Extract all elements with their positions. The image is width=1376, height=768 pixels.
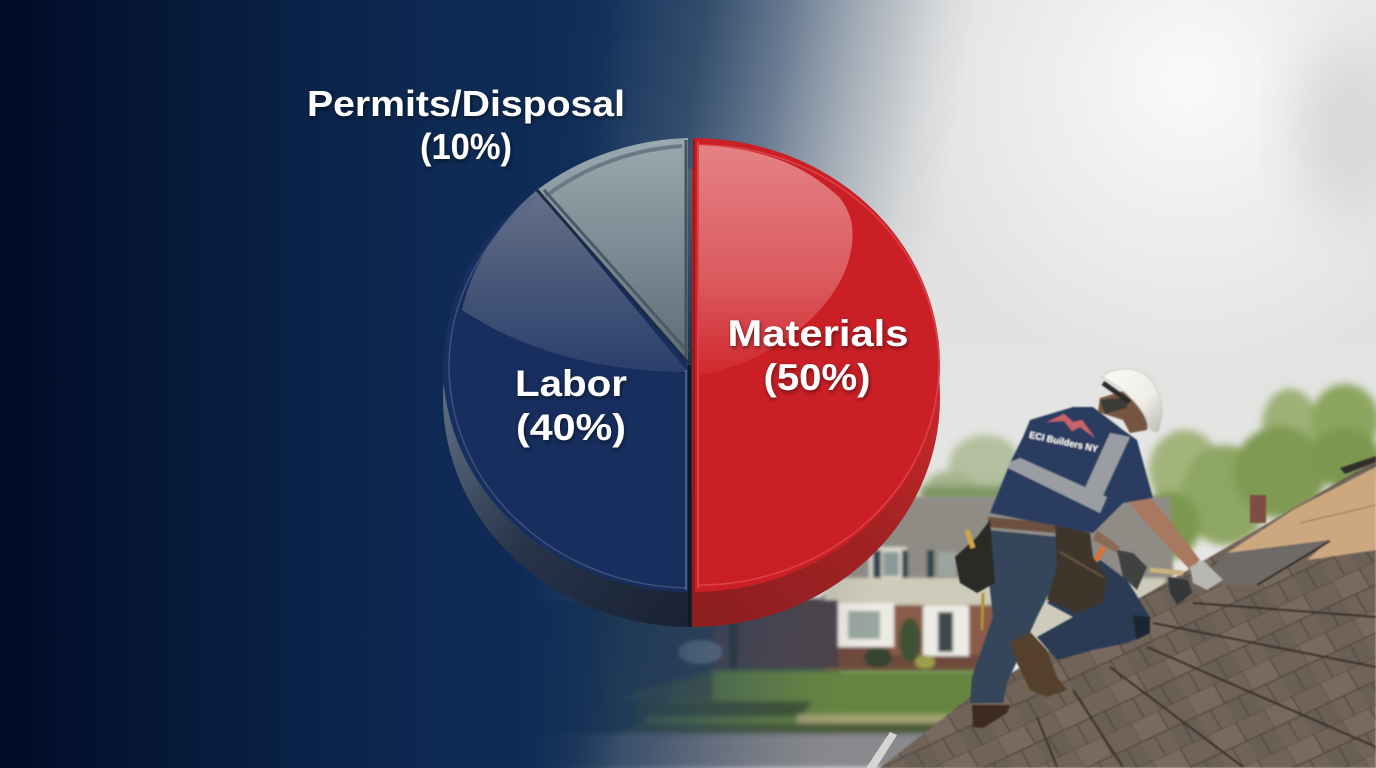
worker: tool belt bbox=[988, 517, 1057, 533]
worker: head and helmet bbox=[1098, 390, 1150, 433]
label: permits/disposal: (10%) bbox=[420, 126, 512, 167]
gutter bbox=[866, 732, 897, 768]
underlayment: bare wood bbox=[1227, 467, 1376, 560]
worker: vest logo: ECI Builders NY bbox=[1028, 430, 1100, 455]
lawn and street bbox=[480, 670, 1010, 768]
label: labor: (40%) bbox=[516, 407, 626, 448]
worker: boot on knee bbox=[1010, 632, 1067, 697]
background photo: roofing worker scene bbox=[558, 0, 1376, 768]
worker: left tool pouch bbox=[955, 520, 995, 593]
dim neighbourhood base behind fade bbox=[480, 600, 840, 740]
pie side: extrusion bbox=[443, 169, 940, 627]
worker: arms bbox=[1130, 497, 1200, 570]
background trees bbox=[920, 384, 1376, 559]
worker: jeans bbox=[970, 530, 1057, 703]
label: labor: Labor bbox=[515, 363, 627, 404]
worker: lower boot bbox=[972, 705, 1010, 728]
worker: gloves bbox=[1190, 560, 1223, 590]
label: permits/disposal bbox=[307, 83, 625, 167]
label: permits/disposal: Permits/Disposal bbox=[307, 83, 625, 124]
worker: right tool pouch bbox=[1047, 523, 1107, 613]
worker: vest logo bbox=[1028, 414, 1100, 455]
roof bbox=[880, 456, 1376, 768]
label: materials: (50%) bbox=[764, 357, 870, 398]
worker: vest bbox=[990, 407, 1153, 533]
worker: reflective strips bbox=[1008, 458, 1107, 513]
slice: labor 40% bbox=[443, 190, 688, 592]
label: labor bbox=[515, 363, 627, 448]
house in background bbox=[678, 497, 1175, 698]
worker bbox=[955, 369, 1223, 728]
label: materials bbox=[728, 313, 908, 398]
slice: materials 50% bbox=[693, 138, 940, 592]
worker: hammer bbox=[1150, 570, 1183, 573]
label: materials: Materials bbox=[728, 313, 908, 354]
pie chart bbox=[443, 138, 940, 627]
slice: permits/disposal 10% bbox=[537, 138, 688, 365]
